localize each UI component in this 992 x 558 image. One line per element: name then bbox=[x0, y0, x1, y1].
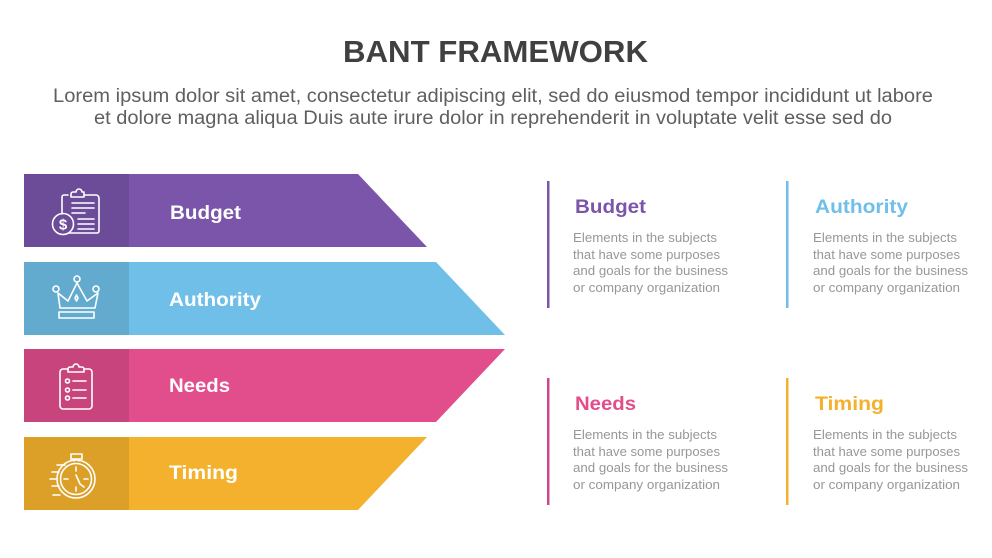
heading: Needs: Needs bbox=[575, 394, 636, 415]
intro paragraph: Lorem ipsum dolor sit amet, consectetur adipiscing elit, sed do eiusmod tempor incididunt ut labore bbox=[53, 86, 933, 107]
panel: Budget description bbox=[547, 181, 728, 308]
icon: crown bbox=[53, 276, 99, 318]
text: Timing body: that have some purposes bbox=[813, 444, 960, 459]
bar: Authority bbox=[24, 262, 505, 335]
text: Needs body: or company organization bbox=[573, 477, 720, 492]
heading: Timing: Timing bbox=[815, 394, 884, 415]
label: Budget: Budget bbox=[170, 203, 242, 224]
icon: budget clipboard with dollar coin bbox=[52, 189, 99, 234]
text: Budget body: and goals for the business bbox=[573, 263, 728, 278]
text: Timing body: or company organization bbox=[813, 477, 960, 492]
text: Needs body: that have some purposes bbox=[573, 444, 720, 459]
text: Authority body: Elements in the subjects bbox=[813, 230, 958, 245]
label: Authority: Authority bbox=[169, 290, 261, 311]
text: Authority body: that have some purposes bbox=[813, 247, 960, 262]
text: Budget body: Elements in the subjects bbox=[573, 230, 718, 245]
label: Timing: Timing bbox=[169, 463, 238, 484]
panel: Authority description bbox=[786, 181, 968, 308]
bar: Timing bbox=[24, 437, 427, 510]
text: Authority body bbox=[813, 230, 968, 295]
icon: budget clipboard with dollar coin: $ bbox=[59, 216, 68, 234]
text: Authority body: or company organization bbox=[813, 280, 960, 295]
panel: Timing description bbox=[786, 378, 968, 505]
heading: Authority: Authority bbox=[815, 197, 908, 218]
label: Needs: Needs bbox=[169, 376, 230, 397]
icon: stopwatch bbox=[50, 454, 95, 498]
text: Budget body bbox=[573, 230, 728, 295]
text: Authority body: and goals for the business bbox=[813, 263, 968, 278]
title: BANT FRAMEWORK bbox=[343, 34, 649, 69]
text: Needs body bbox=[573, 427, 728, 492]
text: Needs body: and goals for the business bbox=[573, 460, 728, 475]
icon: checklist clipboard bbox=[60, 364, 92, 409]
text: Needs body: Elements in the subjects bbox=[573, 427, 718, 442]
heading: Budget: Budget bbox=[575, 197, 647, 218]
text: Budget body: or company organization bbox=[573, 280, 720, 295]
panel: Needs description bbox=[547, 378, 728, 505]
text: Timing body: Elements in the subjects bbox=[813, 427, 958, 442]
bar: Needs bbox=[24, 349, 505, 422]
intro paragraph: et dolore magna aliqua Duis aute irure dolor in reprehenderit in voluptate velit esse sed do bbox=[94, 108, 892, 129]
text: Timing body: and goals for the business bbox=[813, 460, 968, 475]
bar: Budget bbox=[24, 174, 427, 247]
intro paragraph bbox=[53, 86, 933, 129]
text: Budget body: that have some purposes bbox=[573, 247, 720, 262]
text: Timing body bbox=[813, 427, 968, 492]
